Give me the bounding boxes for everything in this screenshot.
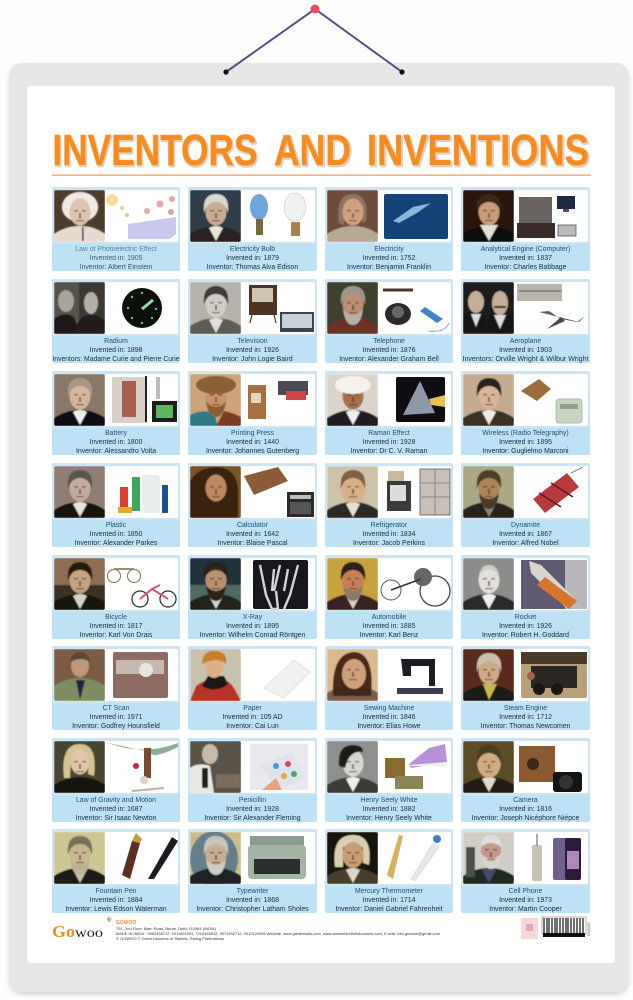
caption: Inventor: Daniel Gabriel Fahrenheit bbox=[335, 906, 443, 913]
caption: Battery bbox=[105, 430, 127, 437]
caption: Television bbox=[237, 338, 268, 345]
portrait: Christopher Latham Sholes bbox=[190, 831, 241, 887]
icon: photoelectric effect bbox=[106, 194, 176, 239]
portrait: Johannes Gutenberg bbox=[190, 374, 241, 426]
card: Sewing Machine bbox=[325, 646, 453, 730]
icon: hand x-ray bbox=[253, 560, 308, 609]
caption: Inventor: Godfrey Hounsfield bbox=[72, 723, 160, 730]
portrait: Alexander Parkes bbox=[54, 466, 105, 518]
portrait: Wilhelm Conrad Rontgen bbox=[190, 558, 241, 610]
card: Electricity bbox=[325, 187, 453, 271]
publisher details bbox=[116, 920, 440, 941]
card: Typewriter bbox=[188, 829, 317, 913]
portrait: Karl Von Drais bbox=[54, 558, 105, 610]
portrait: Joseph Nicephore Niepce bbox=[463, 741, 514, 793]
caption bbox=[207, 246, 298, 271]
caption: Invented in: 1712 bbox=[499, 714, 552, 721]
caption bbox=[481, 705, 571, 730]
caption: Steam Engine bbox=[504, 705, 547, 712]
caption: Inventor: Jacob Perkins bbox=[353, 540, 426, 547]
caption: Electricity Bulb bbox=[230, 246, 275, 253]
caption: Invented in: 1800 bbox=[90, 439, 143, 446]
caption: Inventor: Lewis Edson Waterman bbox=[65, 906, 167, 913]
portrait: Alessandro Volta bbox=[54, 374, 105, 426]
portrait: Jacob Perkins bbox=[327, 466, 378, 518]
caption: Invented in: 105 AD bbox=[222, 714, 283, 721]
logo: GoWoo: woo bbox=[75, 926, 103, 941]
caption bbox=[80, 614, 153, 639]
publisher details: GOWOO bbox=[116, 920, 136, 926]
caption: Inventor: Joseph Nicéphore Niépce bbox=[472, 815, 579, 822]
icon: sewing machine bbox=[397, 659, 443, 694]
icon: bicycles bbox=[108, 569, 176, 607]
caption bbox=[492, 522, 559, 547]
caption: Dynamite bbox=[511, 522, 540, 529]
title: INVENTIONS bbox=[368, 128, 590, 176]
icon: penicillin blister pack bbox=[250, 744, 308, 790]
caption bbox=[482, 614, 569, 639]
caption: Invented in: 1895 bbox=[226, 623, 279, 630]
portrait: Karl Benz bbox=[327, 558, 378, 610]
icon: radium clock bbox=[122, 288, 162, 328]
card: Camera bbox=[461, 738, 590, 822]
caption: Invented in: 1926 bbox=[226, 347, 279, 354]
caption bbox=[200, 614, 306, 639]
caption: Cell Phone bbox=[509, 888, 543, 895]
icon: CT scanner bbox=[113, 652, 168, 698]
portrait: Benjamin Franklin bbox=[327, 190, 378, 242]
caption: Inventor: Martin Cooper bbox=[489, 906, 562, 913]
caption: Inventor: Sir Isaac Newton bbox=[76, 815, 157, 822]
card: Aeroplane bbox=[461, 279, 590, 363]
icon: dynamite bbox=[533, 467, 583, 513]
caption: Invented in: 1687 bbox=[90, 806, 143, 813]
portrait: Sir Isaac Newton bbox=[54, 741, 105, 793]
caption bbox=[482, 430, 569, 455]
caption bbox=[76, 430, 156, 455]
icon: printing presses bbox=[248, 381, 308, 419]
icon: batteries bbox=[112, 376, 177, 423]
barcode: GW125 bbox=[586, 922, 591, 936]
caption: Inventor: Christopher Latham Sholes bbox=[196, 906, 309, 913]
caption: Invented in: 1642 bbox=[226, 531, 279, 538]
caption: Invented in: 1850 bbox=[90, 531, 143, 538]
caption: Henry Seely White bbox=[360, 797, 418, 804]
icon: paper stack bbox=[264, 660, 310, 698]
QR code bbox=[521, 918, 538, 939]
icon: plastic bottles bbox=[118, 475, 168, 513]
caption bbox=[339, 338, 439, 363]
caption bbox=[76, 797, 157, 822]
portrait: Guglielmo Marconi bbox=[463, 374, 514, 426]
card: Automobile bbox=[325, 555, 453, 639]
caption: Inventor: Cai Lun bbox=[226, 723, 279, 730]
icon: typewriter bbox=[248, 836, 306, 879]
caption: Inventor: Alexander Graham Bell bbox=[339, 356, 439, 363]
caption: Inventor: Thomas Alva Edison bbox=[207, 264, 298, 271]
caption: Invented in: 1846 bbox=[363, 714, 416, 721]
icon: fountain pens bbox=[122, 833, 178, 879]
caption: Invented in: 1971 bbox=[90, 714, 143, 721]
caption: Law of Photoelectric Effect bbox=[75, 246, 157, 253]
caption: Radium bbox=[104, 338, 128, 345]
caption: Penicillin bbox=[239, 797, 266, 804]
caption bbox=[196, 888, 309, 913]
caption: Camera bbox=[513, 797, 538, 804]
icon: apple tree bbox=[108, 743, 178, 791]
caption: Automobile bbox=[372, 614, 406, 621]
icon: analytical engine and computers bbox=[517, 196, 576, 238]
caption bbox=[72, 705, 160, 730]
card: Electricity Bulb bbox=[188, 187, 317, 271]
icon: televisions bbox=[249, 285, 314, 332]
caption: Invented in: 1885 bbox=[363, 623, 416, 630]
caption: Inventor: Alexander Parkes bbox=[75, 540, 158, 547]
caption: Plastic bbox=[106, 522, 127, 529]
caption: Telephone bbox=[373, 338, 405, 345]
caption: Calculator bbox=[237, 522, 269, 529]
caption bbox=[206, 430, 299, 455]
caption: Inventor: Charles Babbage bbox=[485, 264, 567, 271]
icon: light bulbs bbox=[250, 193, 306, 236]
caption: Invented in: 1752 bbox=[363, 255, 416, 262]
caption bbox=[75, 522, 158, 547]
portrait: Daniel Gabriel Fahrenheit bbox=[327, 832, 378, 884]
caption bbox=[75, 246, 157, 271]
portrait: Elias Howe bbox=[327, 649, 378, 701]
caption: Invented in: 1905 bbox=[90, 255, 143, 262]
card: Paper bbox=[188, 646, 317, 730]
icon: rocket launch bbox=[521, 560, 587, 609]
icon: steam locomotive bbox=[521, 652, 587, 698]
caption: Inventor: Sir Alexander Fleming bbox=[204, 815, 301, 822]
publisher details: © GOWOO © Great Universe of Sweets, Rising Publications bbox=[116, 937, 224, 941]
caption: Bicycle bbox=[105, 614, 127, 621]
card: Television bbox=[188, 279, 317, 363]
caption: Electricity bbox=[374, 246, 404, 253]
portrait: Robert H. Goddard bbox=[463, 558, 514, 610]
caption bbox=[346, 797, 432, 822]
caption: Inventor: Henry Seely White bbox=[346, 815, 432, 822]
caption: Invented in: 1928 bbox=[226, 806, 279, 813]
portrait: Cai Lun bbox=[190, 649, 241, 701]
title: INVENTIONS bbox=[367, 126, 589, 175]
caption: Law of Gravity and Motion bbox=[76, 797, 156, 804]
card: Radium bbox=[52, 279, 180, 363]
caption: Inventor: Dr C. V. Raman bbox=[351, 448, 428, 455]
card: Battery bbox=[52, 371, 180, 455]
caption: Inventors: Orville Wright & Wilbur Wright bbox=[462, 356, 589, 363]
icon: aeroplanes bbox=[517, 284, 585, 329]
caption: Analytical Engine (Computer) bbox=[481, 246, 570, 253]
card: Law of Photoelectric Effect bbox=[52, 187, 180, 271]
logo: GoWoo: Go bbox=[52, 922, 75, 941]
caption bbox=[472, 797, 579, 822]
caption bbox=[52, 338, 180, 363]
caption: Wireless (Radio Telegraphy) bbox=[482, 430, 569, 437]
caption: Invented in: 1928 bbox=[363, 439, 416, 446]
caption bbox=[481, 246, 570, 271]
portrait: Lewis Edson Waterman bbox=[54, 832, 105, 884]
caption: Inventor: Benjamin Franklin bbox=[347, 264, 431, 271]
card: Fountain Pen bbox=[52, 829, 180, 913]
card: Mercury Thermometer bbox=[325, 829, 453, 913]
card: Plastic bbox=[52, 463, 180, 547]
portrait: Blaise Pascal bbox=[190, 466, 241, 518]
icon: prism bbox=[396, 377, 445, 422]
icon: electric spark bbox=[384, 194, 448, 239]
caption: Aeroplane bbox=[510, 338, 541, 345]
card: Steam Engine bbox=[461, 646, 590, 730]
card: Rocket bbox=[461, 555, 590, 639]
caption: Invented in: 1714 bbox=[363, 897, 416, 904]
caption: Sewing Machine bbox=[364, 705, 414, 712]
caption: Inventor: Alfred Nobel bbox=[492, 540, 559, 547]
caption: Inventor: John Logie Baird bbox=[212, 356, 293, 363]
caption: Inventors: Madame Curie and Pierre Curie bbox=[52, 356, 180, 363]
caption: Invented in: 1876 bbox=[363, 347, 416, 354]
portrait: Sir Alexander Fleming bbox=[190, 741, 241, 793]
caption: Inventor: Karl Benz bbox=[360, 632, 419, 639]
portrait: Marie and Pierre Curie bbox=[54, 282, 105, 334]
caption: Invented in: 1816 bbox=[499, 806, 552, 813]
caption: Raman Effect bbox=[368, 430, 410, 437]
icon: Benz car bbox=[381, 568, 450, 606]
caption: Invented in: 1867 bbox=[499, 531, 552, 538]
title: INVENTORS bbox=[54, 128, 258, 176]
icon: cameras bbox=[519, 746, 582, 792]
caption: Inventor: Johannes Gutenberg bbox=[206, 448, 299, 455]
title: AND bbox=[276, 128, 352, 176]
icon: cell phones bbox=[532, 834, 581, 881]
card: Bicycle bbox=[52, 555, 180, 639]
portrait: Albert Einstein bbox=[54, 190, 105, 242]
caption: Inventor: Elias Howe bbox=[357, 723, 421, 730]
portrait: John Logie Baird bbox=[190, 282, 241, 334]
icon: thermometers bbox=[387, 835, 441, 881]
caption bbox=[462, 338, 589, 363]
caption: Inventor: Guglielmo Marconi bbox=[482, 448, 569, 455]
card: Wireless bbox=[461, 371, 590, 455]
caption bbox=[351, 430, 428, 455]
portrait: Thomas Newcomen bbox=[463, 649, 514, 701]
portrait: Godfrey Hounsfield bbox=[54, 649, 105, 701]
title underline bbox=[52, 174, 591, 176]
caption: Inventor: Karl Von Drais bbox=[80, 632, 153, 639]
caption: X-Ray bbox=[243, 614, 263, 621]
portrait: Thomas Alva Edison bbox=[190, 190, 241, 242]
card: Printing Press bbox=[188, 371, 317, 455]
publisher details: MADE IN INDIA · 9982438712, 9311091591, 7210493532, 9971592712, 9310124083 Website: www.greatminds.com, www.wearemindfuleducators.com, E-mail: info.greams@gmail.com bbox=[116, 932, 440, 936]
caption: Invented in: 1440 bbox=[226, 439, 279, 446]
caption bbox=[489, 888, 562, 913]
logo: GoWoo bbox=[52, 917, 112, 941]
card: Cell Phone bbox=[461, 829, 590, 913]
caption bbox=[357, 705, 421, 730]
card: Calculator bbox=[188, 463, 317, 547]
icon: telephones bbox=[383, 290, 449, 331]
title: AND bbox=[274, 126, 351, 175]
title: INVENTORS bbox=[52, 126, 258, 175]
card: CT Scan bbox=[52, 646, 180, 730]
caption: Inventor: Blaise Pascal bbox=[217, 540, 288, 547]
publisher details: 791, 2nd Floor, Main Road, Burari, Delhi 110084 (INDIA) bbox=[116, 927, 216, 931]
caption bbox=[204, 797, 301, 822]
caption: Printing Press bbox=[231, 430, 274, 437]
caption: Inventor: Wilhelm Conrad Röntgen bbox=[200, 632, 306, 639]
caption: Inventor: Albert Einstein bbox=[80, 264, 153, 271]
caption: Invented in: 1817 bbox=[90, 623, 143, 630]
caption bbox=[65, 888, 167, 913]
caption: Invented in: 1884 bbox=[90, 897, 143, 904]
caption: Invented in: 1882 bbox=[363, 806, 416, 813]
caption: Invented in: 1895 bbox=[499, 439, 552, 446]
hanging cord and pin bbox=[223, 4, 405, 75]
logo: GoWoo: ® bbox=[107, 917, 112, 924]
card: Law of Gravity and Motion bbox=[52, 738, 180, 822]
portrait: Alfred Nobel bbox=[463, 466, 514, 518]
caption: Invented in: 1879 bbox=[226, 255, 279, 262]
portrait: C. V. Raman bbox=[327, 374, 378, 426]
caption: CT Scan bbox=[103, 705, 130, 712]
portrait: Alexander Graham Bell bbox=[327, 282, 378, 334]
portrait: Henry Seely White bbox=[327, 741, 378, 793]
caption: Inventor: Alessandro Volta bbox=[76, 448, 156, 455]
caption: Invented in: 1898 bbox=[90, 347, 143, 354]
caption: Invented in: 1837 bbox=[499, 255, 552, 262]
card: Dynamite bbox=[461, 463, 590, 547]
card: Analytical Engine bbox=[461, 187, 590, 271]
icon: refrigerators bbox=[387, 469, 450, 515]
portrait: Charles Babbage bbox=[463, 190, 514, 242]
caption: Invented in: 1868 bbox=[226, 897, 279, 904]
caption bbox=[347, 246, 431, 271]
caption: Invented in: 1973 bbox=[499, 897, 552, 904]
title bbox=[52, 126, 590, 176]
caption: Invented in: 1834 bbox=[363, 531, 416, 538]
card: Telephone bbox=[325, 279, 453, 363]
icon: irons bbox=[385, 744, 447, 789]
caption: Mercury Thermometer bbox=[355, 888, 424, 895]
caption bbox=[335, 888, 443, 913]
caption: Inventor: Thomas Newcomen bbox=[481, 723, 571, 730]
caption bbox=[222, 705, 283, 730]
caption: Invented in: 1903 bbox=[499, 347, 552, 354]
icon: wireless set and radio bbox=[521, 379, 582, 423]
barcode bbox=[542, 917, 591, 937]
caption bbox=[360, 614, 419, 639]
caption: Fountain Pen bbox=[96, 888, 137, 895]
caption: Inventor: Robert H. Goddard bbox=[482, 632, 569, 639]
caption: Typewriter bbox=[237, 888, 269, 895]
card: X-Ray bbox=[188, 555, 317, 639]
caption bbox=[217, 522, 288, 547]
caption bbox=[353, 522, 426, 547]
caption bbox=[212, 338, 293, 363]
caption: Invented in: 1926 bbox=[499, 623, 552, 630]
caption: Rocket bbox=[515, 614, 536, 621]
caption: Refrigerator bbox=[371, 522, 408, 529]
card: Refrigerator bbox=[325, 463, 453, 547]
portrait: Wright brothers bbox=[463, 282, 514, 334]
portrait: Martin Cooper bbox=[463, 832, 514, 884]
caption: Paper bbox=[243, 705, 262, 712]
card: Henry Seely White bbox=[325, 738, 453, 822]
card: Penicillin bbox=[188, 738, 317, 822]
card: Raman Effect bbox=[325, 371, 453, 455]
icon: calculators bbox=[244, 467, 314, 517]
